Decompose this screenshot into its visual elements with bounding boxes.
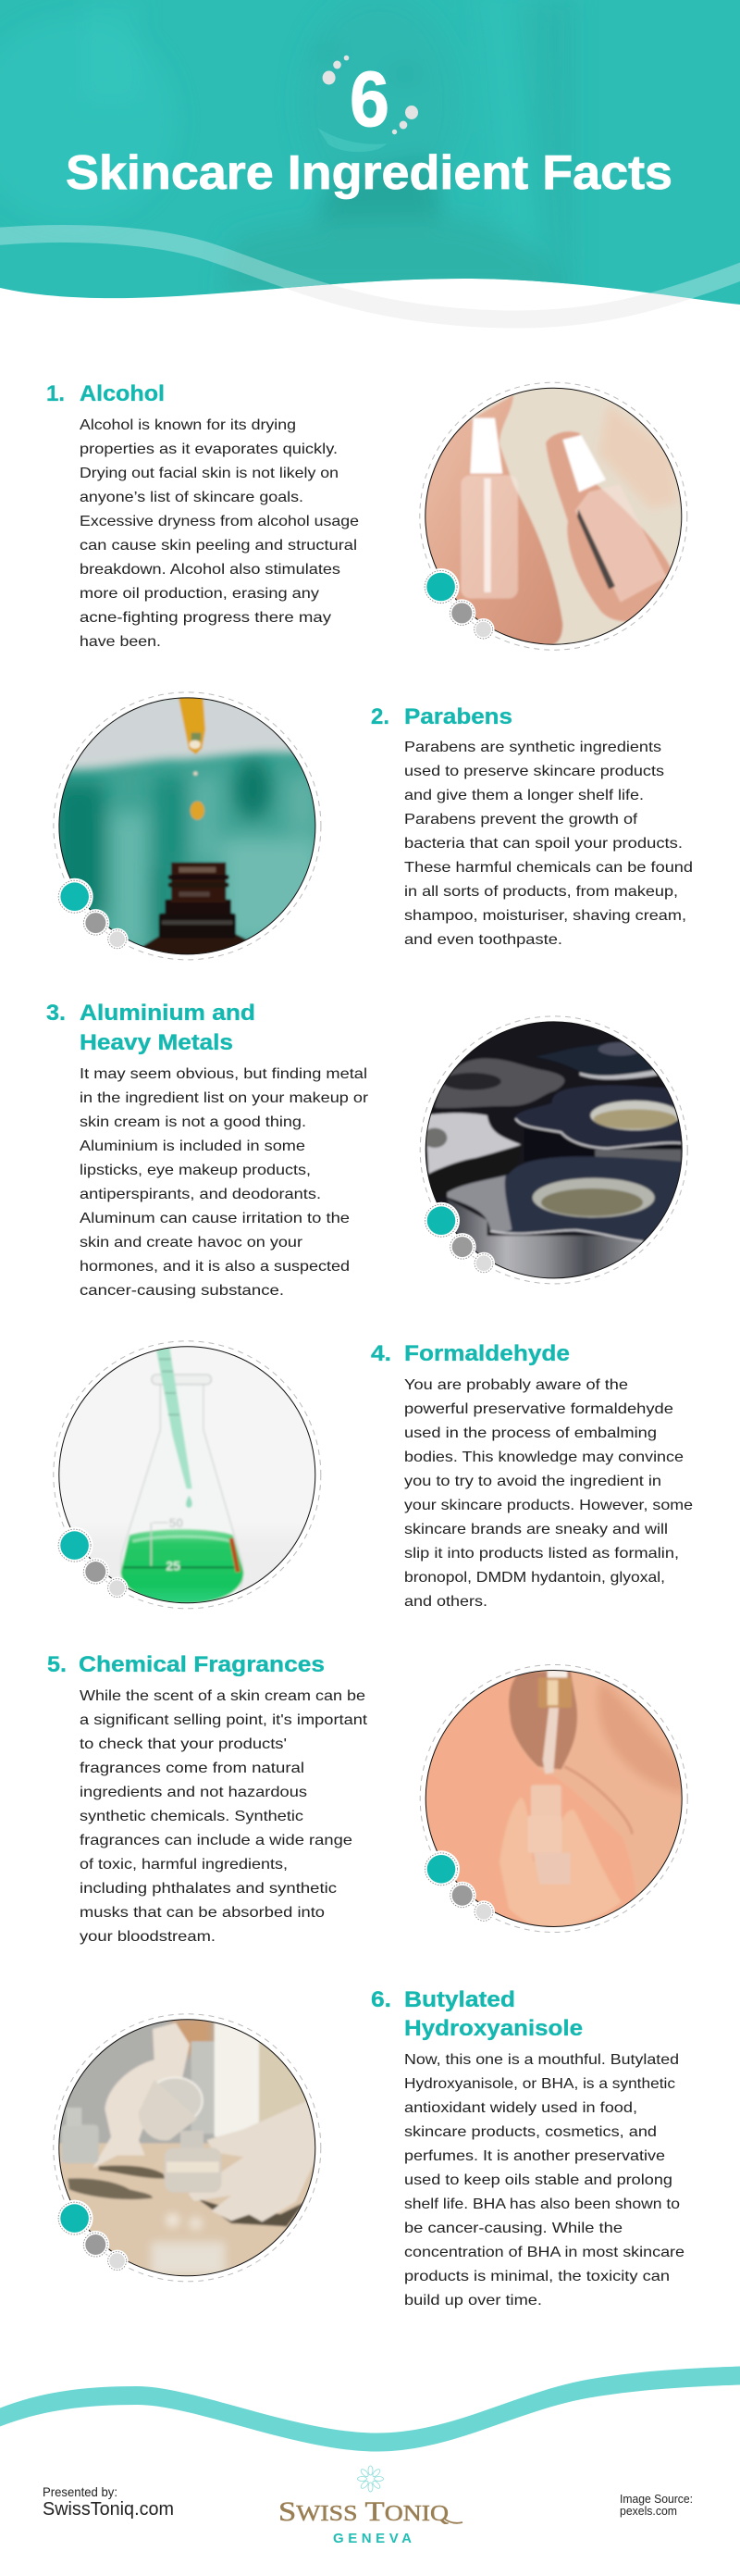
body text: It may seem obvious, but finding metal bbox=[80, 1066, 367, 1082]
image source: pexels.com bbox=[620, 2504, 677, 2518]
heading butylated hydroxyanisole: Hydroxyanisole bbox=[404, 2016, 583, 2041]
heading number 5: 5. bbox=[47, 1652, 67, 1677]
body text: in all sorts of products, from makeup, bbox=[404, 884, 678, 900]
body text: used to keep oils stable and prolong bbox=[404, 2172, 672, 2188]
decoration: ring and dots 2 bbox=[54, 692, 321, 960]
decoration: ring and dots 3 bbox=[420, 1016, 687, 1284]
body text: and others. bbox=[404, 1594, 487, 1610]
body text: Aluminum can cause irritation to the bbox=[80, 1211, 350, 1226]
decoration: ring and dots 1 bbox=[420, 382, 687, 650]
blurred portrait bbox=[215, 67, 577, 294]
body text: breakdown. Alcohol also stimulates bbox=[80, 562, 340, 578]
section 6: butylated hydroxyanisole bbox=[371, 1987, 684, 2308]
logo icon bbox=[357, 2466, 383, 2492]
body text: to check that your products' bbox=[80, 1736, 287, 1752]
body text: hormones, and it is also a suspected bbox=[80, 1259, 350, 1275]
heading aluminium: Aluminium and bbox=[80, 1001, 255, 1026]
body text: Hydroxyanisole, or BHA, is a synthetic bbox=[404, 2076, 675, 2092]
heading chemical fragrances: Chemical Fragrances bbox=[79, 1652, 325, 1677]
body text: bronopol, DMDM hydantoin, glyoxal, bbox=[404, 1570, 665, 1586]
section 2: parabens bbox=[371, 704, 693, 948]
logo wordmark: SWISS TONIQ bbox=[278, 2496, 449, 2527]
presented by: Presented by: bbox=[43, 2484, 117, 2499]
photo: metal nuts bbox=[426, 1022, 682, 1277]
decoration: ring and dots 6 bbox=[54, 2014, 321, 2282]
image source bbox=[620, 2492, 693, 2518]
body text: properties as it evaporates quickly. bbox=[80, 442, 338, 457]
body text: Parabens prevent the growth of bbox=[404, 812, 638, 828]
body text: including phthalates and synthetic bbox=[80, 1881, 337, 1897]
body text: your skincare products. However, some bbox=[404, 1498, 693, 1513]
body text: antiperspirants, and deodorants. bbox=[80, 1187, 321, 1202]
body text bbox=[404, 740, 693, 948]
heading aluminium: Heavy Metals bbox=[80, 1030, 233, 1055]
body text: skin cream is not a good thing. bbox=[80, 1114, 306, 1130]
body text: bodies. This knowledge may convince bbox=[404, 1450, 684, 1465]
decoration: ring and dots 5 bbox=[420, 1664, 687, 1933]
body text: Alcohol is known for its drying bbox=[80, 417, 296, 433]
section 1: alcohol bbox=[46, 381, 359, 650]
heading number 6: 6. bbox=[371, 1987, 391, 2012]
body text: products is minimal, the toxicity can bbox=[404, 2269, 670, 2284]
body text: in the ingredient list on your makeup or bbox=[80, 1090, 369, 1106]
body text: shelf life. BHA has also been shown to bbox=[404, 2196, 680, 2212]
body text: lipsticks, eye makeup products, bbox=[80, 1163, 311, 1178]
body text: build up over time. bbox=[404, 2293, 542, 2308]
section 3: aluminium and heavy metals bbox=[46, 1001, 369, 1299]
presented by bbox=[43, 2484, 174, 2520]
body text: Parabens are synthetic ingredients bbox=[404, 740, 661, 755]
title number: 6 bbox=[350, 56, 389, 143]
body text: used to preserve skincare products bbox=[404, 764, 664, 779]
body text: used in the process of embalming bbox=[404, 1425, 657, 1441]
body text: have been. bbox=[80, 634, 161, 650]
decoration: ring and dots 4 bbox=[54, 1341, 321, 1609]
heading number 3: 3. bbox=[46, 1001, 66, 1026]
photo: oil dropper bbox=[59, 698, 314, 953]
body text: of toxic, harmful ingredients, bbox=[80, 1857, 288, 1873]
heading formaldehyde: Formaldehyde bbox=[404, 1341, 570, 1366]
body text: antioxidant widely used in food, bbox=[404, 2100, 637, 2116]
photo: hands with serum bbox=[426, 1671, 682, 1926]
body text: cancer-causing substance. bbox=[80, 1283, 284, 1299]
body text: shampoo, moisturiser, shaving cream, bbox=[404, 908, 686, 924]
section 5: chemical fragrances bbox=[47, 1652, 368, 1945]
image source: Image Source: bbox=[620, 2492, 693, 2506]
footer wave bbox=[0, 2366, 740, 2451]
body text: perfumes. It is another preservative bbox=[404, 2148, 665, 2164]
smile bbox=[317, 128, 387, 152]
body text: ingredients and not hazardous bbox=[80, 1785, 307, 1800]
header ribbon translucent bbox=[0, 225, 740, 298]
body text: skincare brands are sneaky and will bbox=[404, 1522, 668, 1537]
body text bbox=[80, 417, 359, 650]
body text: You are probably aware of the bbox=[404, 1377, 628, 1393]
header ribbon over white bbox=[0, 234, 740, 319]
flask marks: 25 bbox=[166, 1559, 180, 1574]
logo geneva: GENEVA bbox=[333, 2531, 412, 2546]
heading butylated hydroxyanisole bbox=[404, 1987, 583, 2041]
body text: Drying out facial skin is not likely on bbox=[80, 466, 339, 481]
body text: more oil production, erasing any bbox=[80, 586, 319, 602]
heading butylated hydroxyanisole: Butylated bbox=[404, 1987, 515, 2012]
body text: slip it into products listed as formalin, bbox=[404, 1546, 679, 1562]
body text: and give them a longer shelf life. bbox=[404, 788, 644, 803]
flask marks: 50 bbox=[169, 1515, 183, 1530]
body text bbox=[404, 1377, 693, 1610]
photo: green flask bbox=[59, 1348, 314, 1603]
body text: synthetic chemicals. Synthetic bbox=[80, 1809, 303, 1824]
section 4: formaldehyde bbox=[371, 1341, 693, 1610]
body text: powerful preservative formaldehyde bbox=[404, 1401, 673, 1417]
body text: musks that can be absorbed into bbox=[80, 1905, 325, 1921]
body text: be cancer-causing. While the bbox=[404, 2221, 623, 2236]
body text bbox=[80, 1688, 368, 1945]
body text: fragrances come from natural bbox=[80, 1761, 304, 1776]
heading parabens: Parabens bbox=[404, 704, 512, 729]
body text: a significant selling point, it's important bbox=[80, 1712, 368, 1728]
body text: These harmful chemicals can be found bbox=[404, 860, 693, 876]
body text: your bloodstream. bbox=[80, 1929, 216, 1945]
body text: and even toothpaste. bbox=[404, 932, 562, 948]
body text: you to try to avoid the ingredient in bbox=[404, 1474, 661, 1489]
heading aluminium bbox=[80, 1001, 255, 1055]
body text: bacteria that can spoil your products. bbox=[404, 836, 683, 852]
photo: gloved hands pouring bbox=[59, 2020, 314, 2275]
heading number 1: 1. bbox=[46, 381, 65, 406]
body text: Excessive dryness from alcohol usage bbox=[80, 514, 359, 529]
header banner bbox=[0, 0, 740, 319]
body text: acne-fighting progress there may bbox=[80, 610, 331, 626]
heading number 2: 2. bbox=[371, 704, 389, 729]
body text: skincare products, cosmetics, and bbox=[404, 2124, 657, 2140]
presented by: SwissToniq.com bbox=[43, 2499, 174, 2520]
heading alcohol: Alcohol bbox=[80, 381, 165, 406]
heading number 4: 4. bbox=[371, 1341, 391, 1366]
title: Skincare Ingredient Facts bbox=[66, 146, 672, 200]
body text: skin and create havoc on your bbox=[80, 1235, 303, 1251]
body text bbox=[404, 2052, 684, 2308]
photo: spray bottles bbox=[426, 389, 681, 644]
flask marks bbox=[166, 1515, 183, 1574]
bubbles bbox=[323, 56, 418, 134]
body text: concentration of BHA in most skincare bbox=[404, 2245, 684, 2260]
body text bbox=[80, 1066, 369, 1299]
body text: anyone’s list of skincare goals. bbox=[80, 490, 303, 505]
body text: Now, this one is a mouthful. Butylated bbox=[404, 2052, 679, 2068]
body text: can cause skin peeling and structural bbox=[80, 538, 357, 554]
body text: While the scent of a skin cream can be bbox=[80, 1688, 365, 1704]
body text: fragrances can include a wide range bbox=[80, 1833, 352, 1848]
body text: Aluminium is included in some bbox=[80, 1139, 305, 1154]
